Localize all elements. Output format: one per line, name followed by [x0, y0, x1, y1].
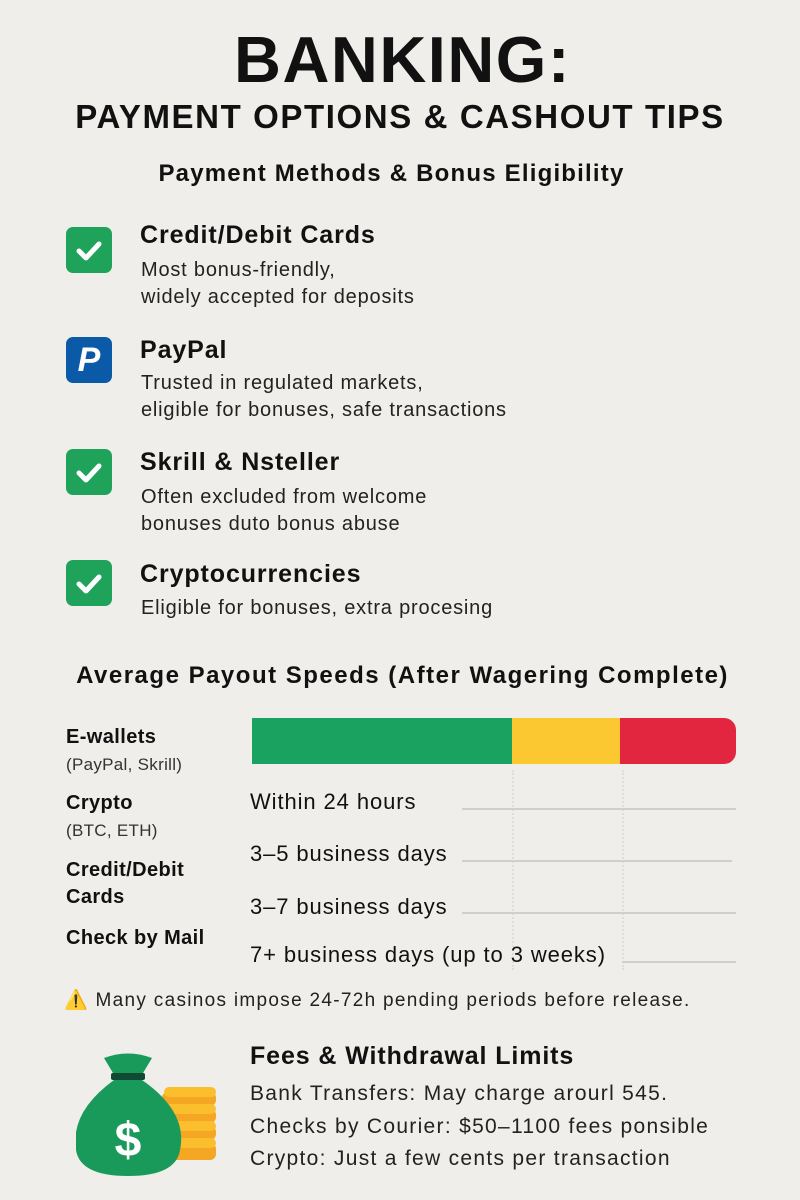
text: Credit/Debit Cards: [140, 221, 376, 249]
fees text: Bank Transfers: May charge arourl 545.: [250, 1082, 668, 1105]
fees text: [250, 1082, 709, 1170]
icon: check: [66, 449, 112, 495]
title: BANKING:: [234, 23, 571, 96]
subtitle: PAYMENT OPTIONS & CASHOUT TIPS: [75, 98, 725, 135]
item: credit/debit cards: [66, 227, 112, 273]
warning note: ⚠️ Many casinos impose 24-72h pending periods before release.: [64, 990, 691, 1011]
text: Trusted in regulated markets,: [141, 372, 424, 394]
icon: check: [66, 560, 112, 606]
speed values: Within 24 hours: [250, 789, 416, 814]
text: Credit/Debit: [66, 859, 184, 881]
fees heading: Fees & Withdrawal Limits: [250, 1042, 574, 1070]
icon: paypal: [66, 337, 112, 383]
section heading: payment methods: Payment Methods & Bonus Eligibility: [158, 160, 625, 187]
text: 7+ business days (up to 3 weeks): [250, 942, 606, 967]
text: eligible for bonuses, safe transactions: [141, 399, 507, 421]
fees text: Crypto: Just a few cents per transaction: [250, 1147, 671, 1170]
icon: check: [66, 227, 112, 273]
text: Often excluded from welcome: [141, 486, 427, 508]
icon: money bag: $: [115, 1114, 142, 1167]
labels: (PayPal, Skrill): [66, 755, 182, 774]
bar chart: [252, 718, 736, 764]
labels: E-wallets: [66, 726, 156, 748]
text: Cards: [66, 886, 125, 908]
text: 3–7 business days: [250, 894, 448, 919]
section heading: payout speeds: Average Payout Speeds (After Wagering Complete): [76, 662, 729, 689]
fees text: Checks by Courier: $50–1100 fees ponsible: [250, 1114, 709, 1138]
text: (BTC, ETH): [66, 821, 158, 840]
text: Eligible for bonuses, extra procesing: [141, 597, 493, 619]
icon: paypal: P: [78, 341, 100, 379]
icon: money bag: [76, 1054, 216, 1176]
text: widely accepted for deposits: [141, 286, 415, 308]
text: bonuses duto bonus abuse: [141, 513, 400, 535]
text: Crypto: [66, 792, 133, 814]
text: PayPal: [140, 336, 227, 364]
text: Check by Mail: [66, 927, 205, 949]
text: Cryptocurrencies: [140, 560, 361, 588]
text: Most bonus-friendly,: [141, 259, 336, 281]
item: skrill: [66, 449, 112, 495]
text: Skrill & Nsteller: [140, 448, 340, 476]
labels: [66, 726, 182, 774]
text: 3–5 business days: [250, 841, 448, 866]
item: crypto: [66, 560, 112, 606]
